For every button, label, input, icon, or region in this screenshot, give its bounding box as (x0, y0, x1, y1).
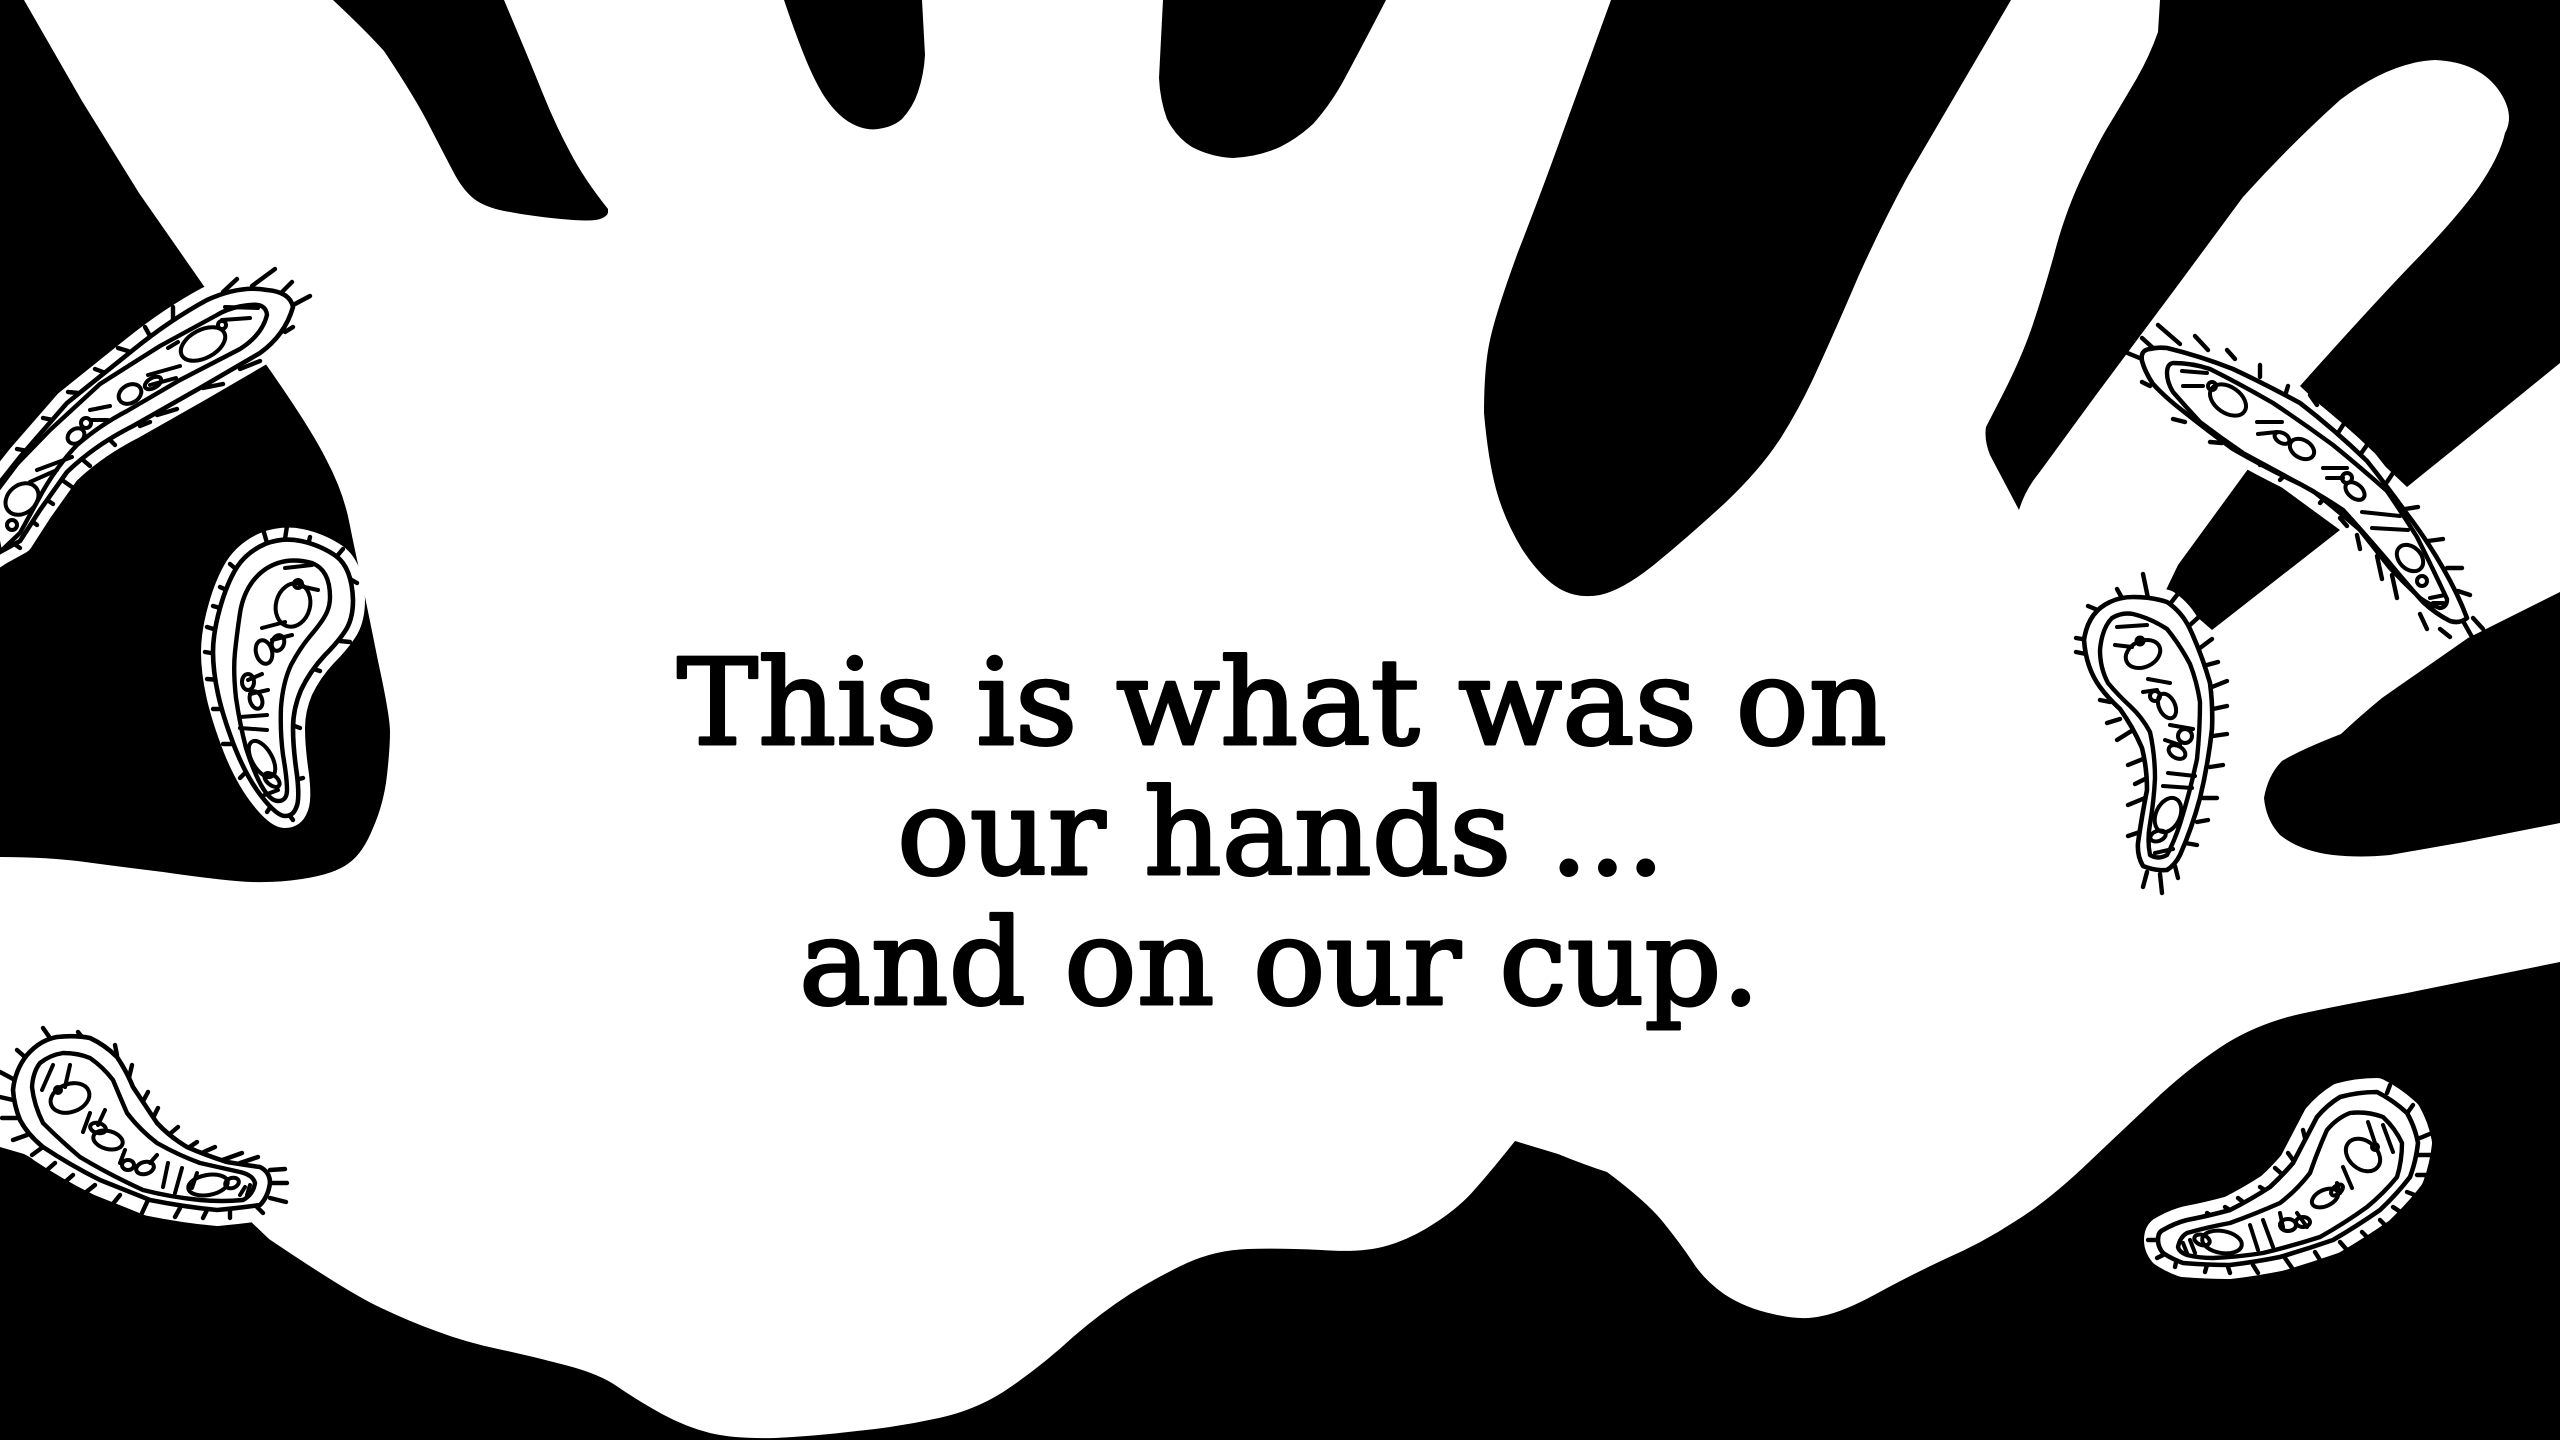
main text: and on our cup. (799, 895, 1760, 1033)
main text (677, 635, 1887, 1033)
icon: germ, lower left (0, 1028, 287, 1218)
icon: germ, upper left (0, 269, 310, 565)
icon: germ, upper right across finger (2125, 325, 2483, 637)
main text: This is what was on (677, 635, 1887, 773)
icon: germ, lower right (2148, 1085, 2435, 1273)
icon: germ, right curved (2076, 574, 2227, 893)
icon: germ, left curved (205, 526, 357, 820)
main text: our hands ... (897, 765, 1665, 903)
